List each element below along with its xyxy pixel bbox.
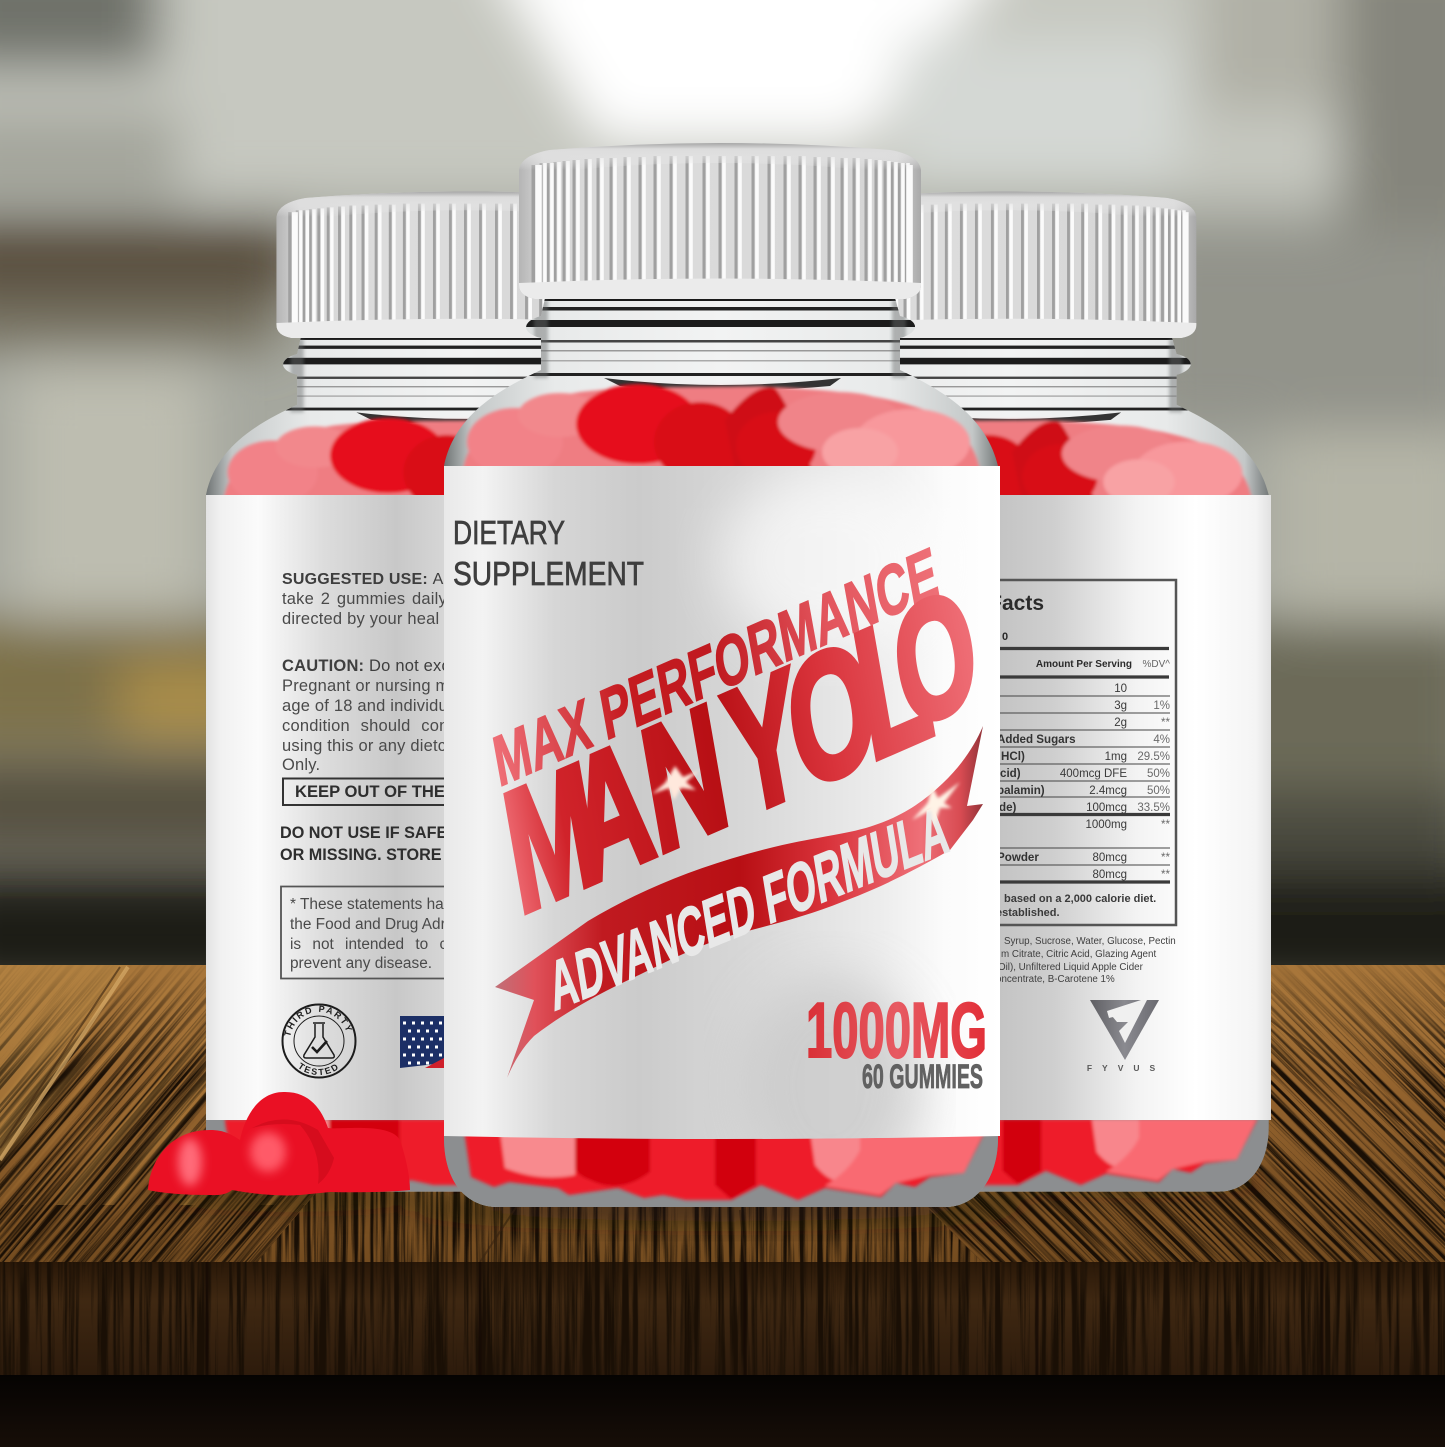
nutrient names <box>997 733 1076 864</box>
FDA disclaimer box: prevent any disease. <box>290 955 432 972</box>
icon: third party tested badge <box>282 1004 356 1078</box>
main label panel <box>444 466 1000 1195</box>
daily value percentages: 50% <box>1147 768 1170 780</box>
suggested use text: SUGGESTED USE: A <box>282 571 444 588</box>
caution text: Only. <box>282 756 320 774</box>
nutrient names: Powder <box>997 851 1039 864</box>
nutrient names: cid) <box>1000 767 1021 780</box>
manyolo brand name: A <box>556 700 665 924</box>
safety seal warning <box>280 824 447 864</box>
icon: american flag <box>400 1016 470 1068</box>
dark underside of table <box>0 1375 1445 1447</box>
footnote <box>996 893 1156 919</box>
left back bottle <box>206 191 729 1195</box>
icon: sparkle on ribbon <box>912 782 960 826</box>
footnote: established. <box>996 907 1060 919</box>
supplement facts box: 0 <box>1002 631 1008 643</box>
manyolo brand name: M <box>492 724 611 951</box>
main bottle <box>444 143 1000 1211</box>
manyolo brand name: L <box>842 571 943 800</box>
logo: fyvus <box>1087 1000 1165 1073</box>
daily value percentages: ** <box>1161 717 1171 729</box>
daily value percentages: ** <box>1161 819 1171 831</box>
manyolo brand name: N <box>630 664 740 892</box>
safety seal warning: OR MISSING. STORE <box>280 846 442 864</box>
loose red gummies <box>148 1092 410 1195</box>
caution text: Pregnant or nursing m <box>282 677 449 695</box>
FDA disclaimer box: * These statements hav <box>290 896 452 913</box>
amounts: 2.4mcg <box>1089 785 1127 797</box>
advanced formula text: ADVANCED FORMULA <box>544 790 953 1026</box>
supplement facts box <box>989 580 1176 925</box>
suggested use text: take 2 gummies daily <box>282 590 448 608</box>
suggested use text <box>282 571 448 628</box>
keep out of reach box <box>283 778 460 805</box>
dietary supplement heading <box>453 514 644 592</box>
amounts: 100mcg <box>1086 802 1127 814</box>
manyolo brand name: O <box>881 550 990 766</box>
daily value percentages: 33.5% <box>1137 802 1170 814</box>
table header: Amount Per Serving <box>1036 659 1132 670</box>
amounts: 3g <box>1114 700 1127 712</box>
logo: fyvus: FYVUS <box>1087 1063 1165 1073</box>
amounts: 2g <box>1114 717 1127 729</box>
table rules <box>990 648 1170 882</box>
facts heading: Facts <box>989 592 1044 615</box>
ingredients list: Syrup, Sucrose, Water, Glucose, Pectin <box>1004 936 1176 947</box>
ingredients list: Oil), Unfiltered Liquid Apple Cider <box>998 962 1144 973</box>
daily value percentages <box>1137 700 1171 881</box>
daily value percentages: 50% <box>1147 785 1170 797</box>
ingredients list: oncentrate, B-Carotene 1% <box>996 974 1115 985</box>
nutrient names: Added Sugars <box>997 733 1076 746</box>
safety seal warning: DO NOT USE IF SAFE <box>280 824 447 842</box>
icon: third party tested badge: THIRD PARTY <box>284 1006 352 1036</box>
daily value percentages: ** <box>1161 852 1171 864</box>
dietary supplement heading: SUPPLEMENT <box>453 555 644 592</box>
caution text: using this or any dietc <box>282 737 446 755</box>
60 gummies count: 60 GUMMIES <box>862 1058 983 1096</box>
daily value percentages: 4% <box>1153 734 1170 746</box>
suggested use text: directed by your heal <box>282 610 439 628</box>
left bottle label panel: directions <box>206 495 452 1120</box>
blurred room background <box>0 0 1445 1000</box>
nutrient names: HCl) <box>1001 750 1025 763</box>
dietary supplement heading: DIETARY <box>453 514 565 551</box>
caution text: CAUTION: Do not exc <box>282 657 450 675</box>
daily value percentages: 29.5% <box>1137 751 1170 763</box>
daily value percentages: ** <box>1161 869 1171 881</box>
icon: third party tested badge: TESTED <box>299 1062 338 1075</box>
right back bottle <box>748 191 1271 1195</box>
caution text: condition should con <box>282 717 448 735</box>
right bottle label panel: supplement facts <box>940 495 1271 1120</box>
ribbon banner <box>495 726 983 1078</box>
FDA disclaimer box <box>281 886 460 978</box>
bottle shadows on table <box>140 1174 1280 1222</box>
amounts: 400mcg DFE <box>1060 768 1127 780</box>
ingredients list <box>996 936 1176 985</box>
amounts: 80mcg <box>1092 852 1127 864</box>
caution text: age of 18 and individu <box>282 697 448 715</box>
FDA disclaimer box: is not intended to c <box>290 936 448 953</box>
ingredients list: m Citrate, Citric Acid, Glazing Agent <box>1001 949 1156 960</box>
max performance tagline: MAX PERFORMANCE <box>488 532 943 802</box>
FDA disclaimer box: the Food and Drug Adr <box>290 916 446 933</box>
amounts: 80mcg <box>1092 869 1127 881</box>
amounts: 10 <box>1114 683 1127 695</box>
amounts <box>1060 683 1127 881</box>
caution text <box>282 657 450 774</box>
amounts: 1000mg <box>1085 819 1127 831</box>
keep out of reach box: KEEP OUT OF THE <box>295 782 445 801</box>
wooden table top <box>0 965 1445 1262</box>
daily value percentages: 1% <box>1153 700 1170 712</box>
table front edge <box>0 1262 1445 1375</box>
1000mg strength: 1000MG <box>806 986 987 1074</box>
manyolo brand name: O <box>774 599 890 829</box>
table header: %DV^ <box>1143 659 1170 670</box>
amounts: 1mg <box>1105 751 1127 763</box>
nutrient names: de) <box>999 801 1017 814</box>
icon: sparkle on brand name <box>652 766 700 800</box>
nutrient names: palamin) <box>997 784 1045 797</box>
footnote: based on a 2,000 calorie diet. <box>1004 893 1156 905</box>
manyolo brand name: Y <box>712 629 818 856</box>
